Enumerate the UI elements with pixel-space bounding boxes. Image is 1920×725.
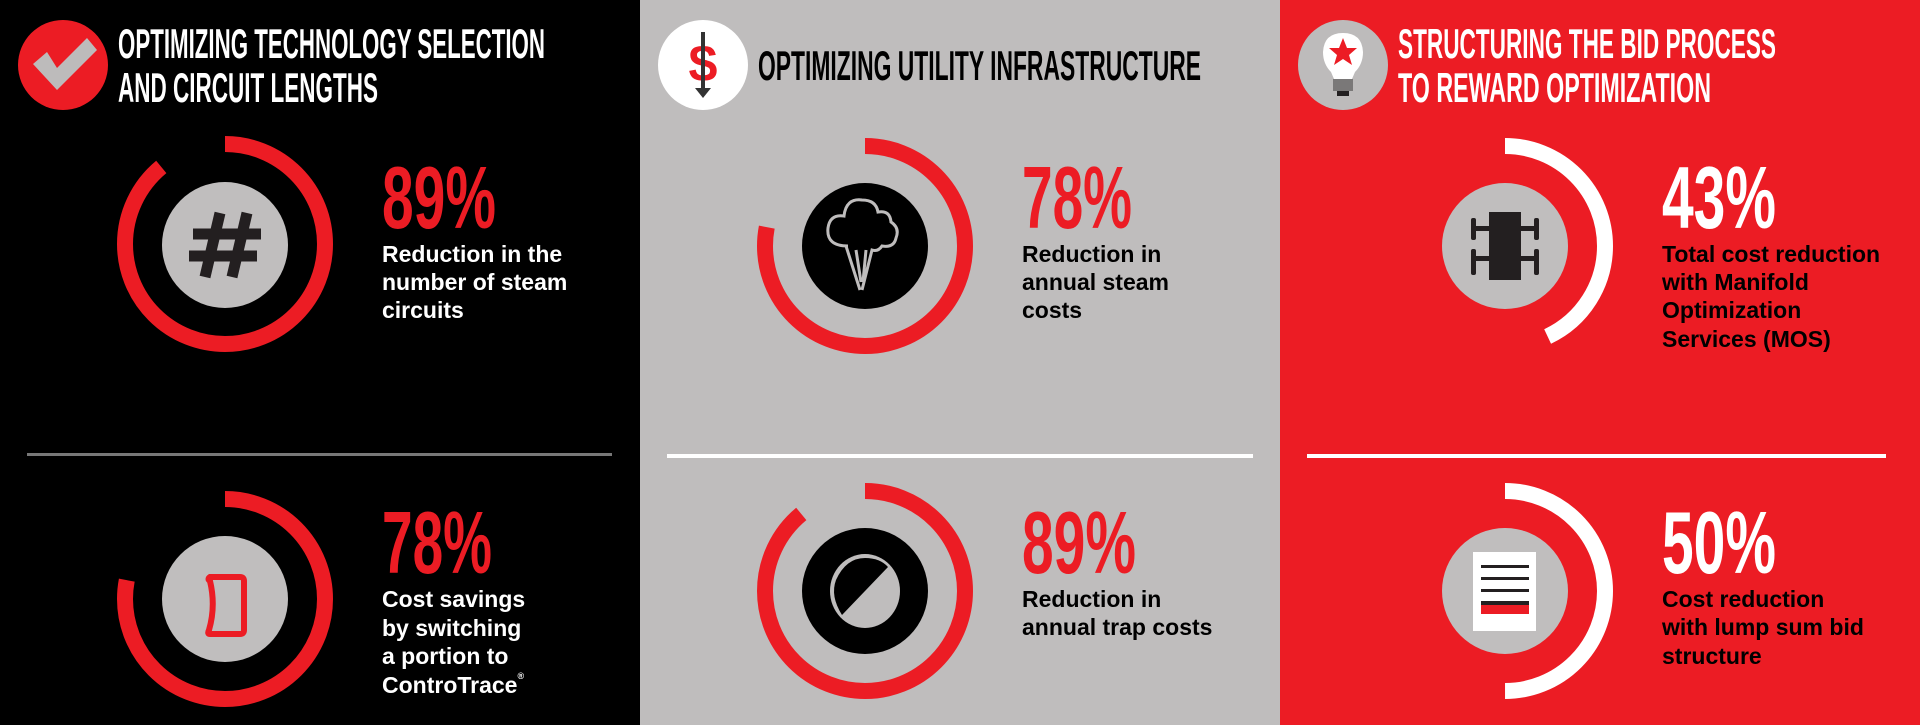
- chart: 50% ring: [1405, 491, 1605, 691]
- stat: 89%: 89%: [382, 148, 496, 247]
- icon: hash: [189, 213, 261, 277]
- chart: 78% ring: [125, 499, 325, 699]
- panel: bid process: [1280, 0, 1920, 725]
- chart: 89% ring: [125, 144, 325, 344]
- text: cost savings: ControTrace: [382, 672, 517, 698]
- text: reduction in annual trap costs: annual trap costs: [1022, 614, 1212, 640]
- heading: technology selection: OPTIMIZING TECHNOLOGY SELECTION: [118, 20, 545, 67]
- text: cost savings: by switching: [382, 615, 521, 641]
- icon: steam cloud: [828, 200, 897, 290]
- text: cost savings: a portion to: [382, 643, 508, 669]
- stat: 78%: 78%: [1022, 148, 1132, 247]
- icon: manifold: [1471, 212, 1539, 280]
- icon: lightbulb star: [1298, 20, 1388, 110]
- icon: dollar down: [658, 20, 748, 110]
- text: total cost reduction: with Manifold: [1661, 269, 1809, 295]
- icon: dollar down: $: [689, 35, 718, 93]
- icon: gauge: [830, 554, 900, 628]
- panel: technology selection: [0, 0, 640, 725]
- text: cost reduction lump sum: with lump sum bid: [1661, 614, 1864, 640]
- text: cost reduction lump sum: Cost reduction: [1662, 586, 1824, 612]
- icon: document: [1473, 552, 1536, 631]
- text: reduction in steam circuits: Reduction in the: [382, 241, 562, 267]
- chart: 78% ring: [765, 146, 965, 346]
- text: reduction in annual steam costs: Reduction in: [1022, 241, 1161, 267]
- text: cost savings: Cost savings: [382, 586, 525, 612]
- text: reduction in annual trap costs: Reduction in: [1022, 586, 1161, 612]
- text: reduction in steam circuits: circuits: [382, 297, 464, 323]
- stat: 43%: 43%: [1662, 148, 1776, 247]
- heading line 2: AND CIRCUIT LENGTHS: [118, 64, 378, 111]
- text: cost savings: ®: [517, 671, 524, 681]
- text: total cost reduction: Total cost reduction: [1662, 241, 1880, 267]
- text: total cost reduction: Optimization: [1662, 297, 1801, 323]
- icon: controtrace profile: [208, 577, 244, 634]
- text: reduction in annual steam costs: annual steam: [1022, 269, 1169, 295]
- stat: 50%: 50%: [1662, 493, 1776, 592]
- text: total cost reduction: Services (MOS): [1662, 326, 1831, 352]
- stat: 78%: 78%: [382, 493, 492, 592]
- icon: ruler check: [18, 20, 108, 110]
- stat: 89%: 89%: [1022, 493, 1136, 592]
- chart: 43% ring: [1405, 146, 1605, 346]
- heading: utility infrastructure: OPTIMIZING UTILITY INFRASTRUCTURE: [758, 42, 1201, 89]
- panel: utility infrastructure: [640, 0, 1280, 725]
- text: reduction in steam circuits: number of steam: [382, 269, 567, 295]
- chart: 89% ring: [765, 491, 965, 691]
- text: cost reduction lump sum: structure: [1662, 643, 1762, 669]
- text: reduction in annual steam costs: costs: [1022, 297, 1082, 323]
